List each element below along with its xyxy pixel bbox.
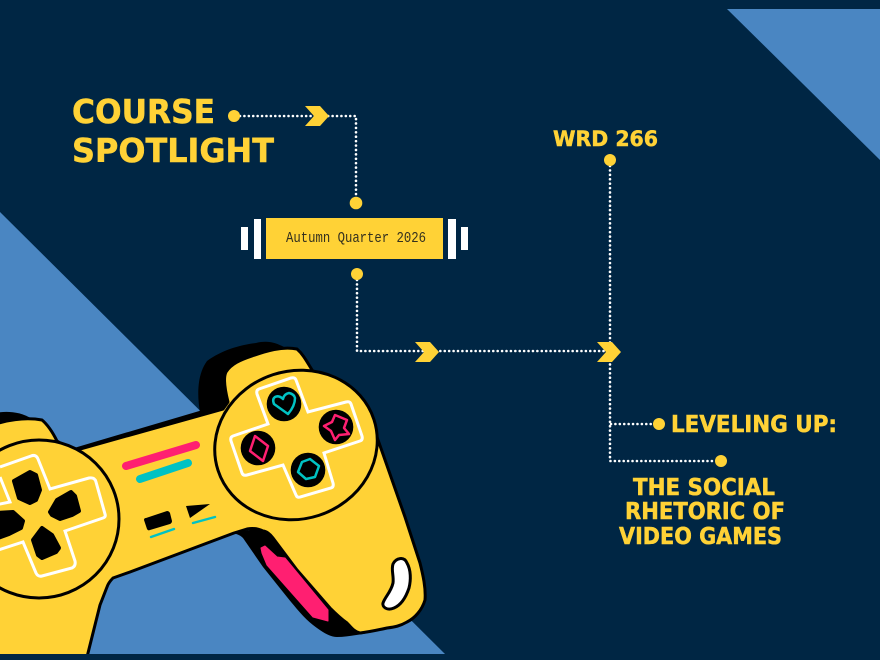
title: SPOTLIGHT xyxy=(72,131,274,170)
subtitle: social rhetoric: RHETORIC OF xyxy=(625,499,785,525)
subtitle: social rhetoric: VIDEO GAMES xyxy=(619,524,782,550)
button icon: hexagon xyxy=(298,459,319,479)
subtitle: social rhetoric: THE SOCIAL xyxy=(633,475,775,501)
title: COURSE xyxy=(72,92,215,131)
trigger: pink xyxy=(261,546,328,621)
start button xyxy=(186,504,215,523)
subtitle: social rhetoric xyxy=(619,475,785,550)
left pad xyxy=(0,440,119,598)
right cross outline xyxy=(231,378,362,497)
subtitle: leveling up: LEVELING UP: xyxy=(671,412,837,438)
triangle: top right xyxy=(727,9,880,160)
connector: date banner to course details xyxy=(351,154,727,467)
right pad xyxy=(213,368,379,522)
controller shadows xyxy=(0,342,392,637)
controller body xyxy=(0,348,425,660)
button icon: diamond xyxy=(250,436,268,461)
left cross outline xyxy=(0,455,105,576)
date banner: Autumn Quarter 2026 xyxy=(286,230,426,247)
select button xyxy=(144,511,174,537)
icon: game controller xyxy=(0,342,425,660)
centre stripes xyxy=(126,445,196,466)
date banner xyxy=(241,218,468,259)
course code: WRD 266 xyxy=(553,127,658,151)
right cross buttons xyxy=(267,387,301,421)
connector: title to date banner xyxy=(228,106,362,209)
thumb grip: white xyxy=(383,559,410,609)
triangle: bottom left xyxy=(0,212,445,654)
button icon: heart xyxy=(273,393,295,414)
left cross buttons xyxy=(0,472,79,558)
button icon: star xyxy=(324,415,349,440)
title xyxy=(72,92,274,170)
